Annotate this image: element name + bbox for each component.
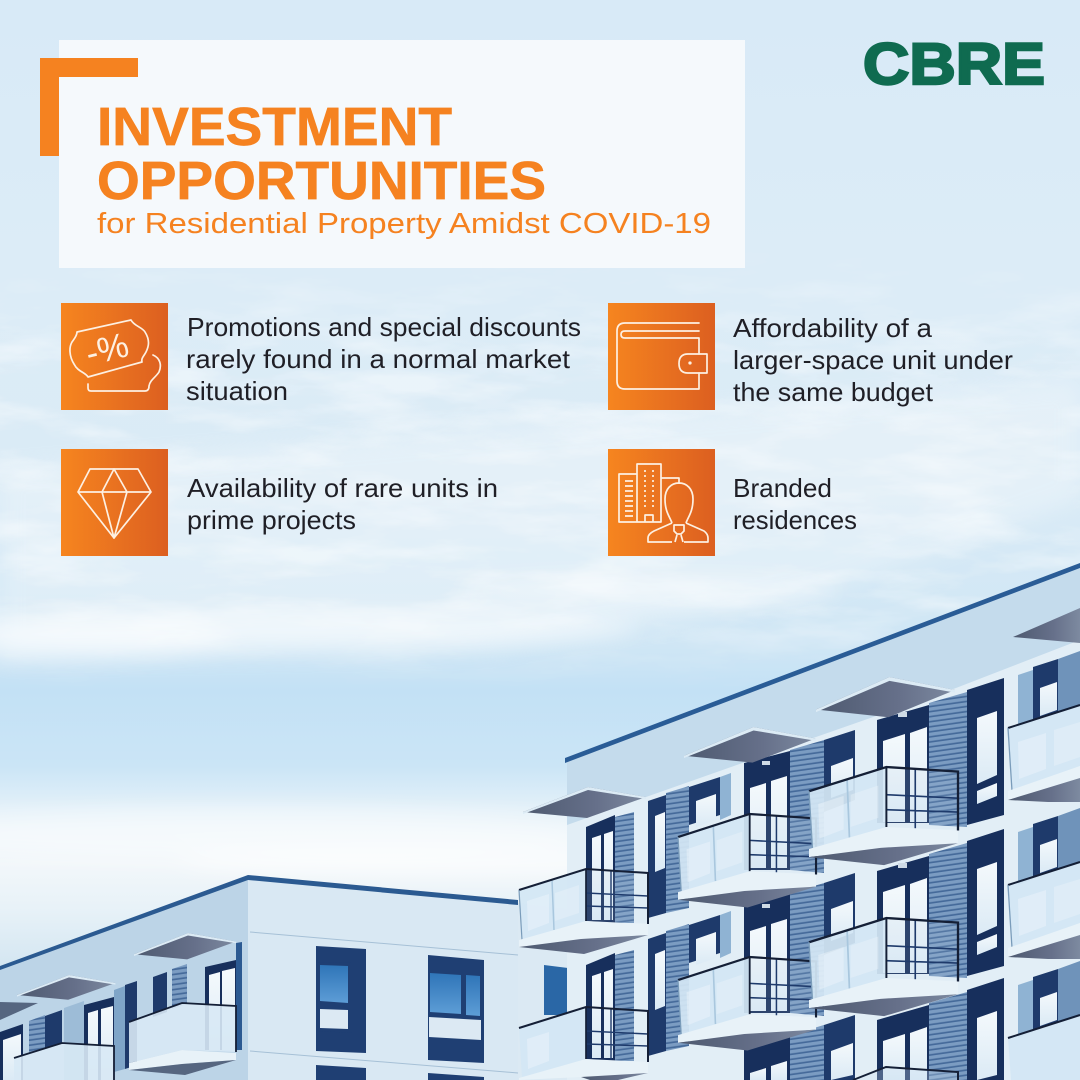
benefit text: rare units: Availability of rare units in <box>187 473 498 503</box>
icon: discount tickets: -% <box>82 325 133 374</box>
title heading: OPPORTUNITIES <box>97 151 546 211</box>
benefit text: branded residences: residences <box>733 505 857 535</box>
benefit text: rare units <box>187 473 498 535</box>
benefit text: rare units: prime projects <box>187 505 356 535</box>
benefit text: promotions: Promotions and special discounts <box>187 312 581 342</box>
title heading: for Residential Property Amidst COVID-19 <box>97 208 711 240</box>
lower-row walls (clipped at page bottom) <box>744 978 1004 1080</box>
bottom-row balconies (clipped at page bottom) <box>519 1007 1080 1080</box>
benefit text: affordability <box>733 313 1013 407</box>
benefit text: affordability: Affordability of a <box>733 313 933 343</box>
photo: left apartment building <box>0 875 568 1080</box>
title panel <box>59 40 745 268</box>
photo: right apartment building <box>519 563 1080 1080</box>
benefit text: affordability: the same budget <box>733 377 934 407</box>
icon: wallet <box>608 303 715 410</box>
benefit text: promotions <box>186 312 581 406</box>
CBRE logo: CBRE <box>863 32 1045 97</box>
icon: diamond <box>61 449 168 556</box>
benefit text: promotions: rarely found in a normal market <box>186 344 571 374</box>
title heading: INVESTMENT <box>97 97 452 157</box>
benefit text: branded residences: Branded <box>733 473 832 503</box>
benefit text: affordability: larger-space unit under <box>733 345 1013 375</box>
icon: towers and person <box>608 449 715 556</box>
orange corner bracket <box>40 58 138 156</box>
title heading <box>97 97 711 240</box>
benefit text: branded residences <box>733 473 857 535</box>
background: sky with clouds <box>0 284 1080 930</box>
benefit text: promotions: situation <box>186 376 288 406</box>
icon: discount tickets <box>61 303 168 410</box>
